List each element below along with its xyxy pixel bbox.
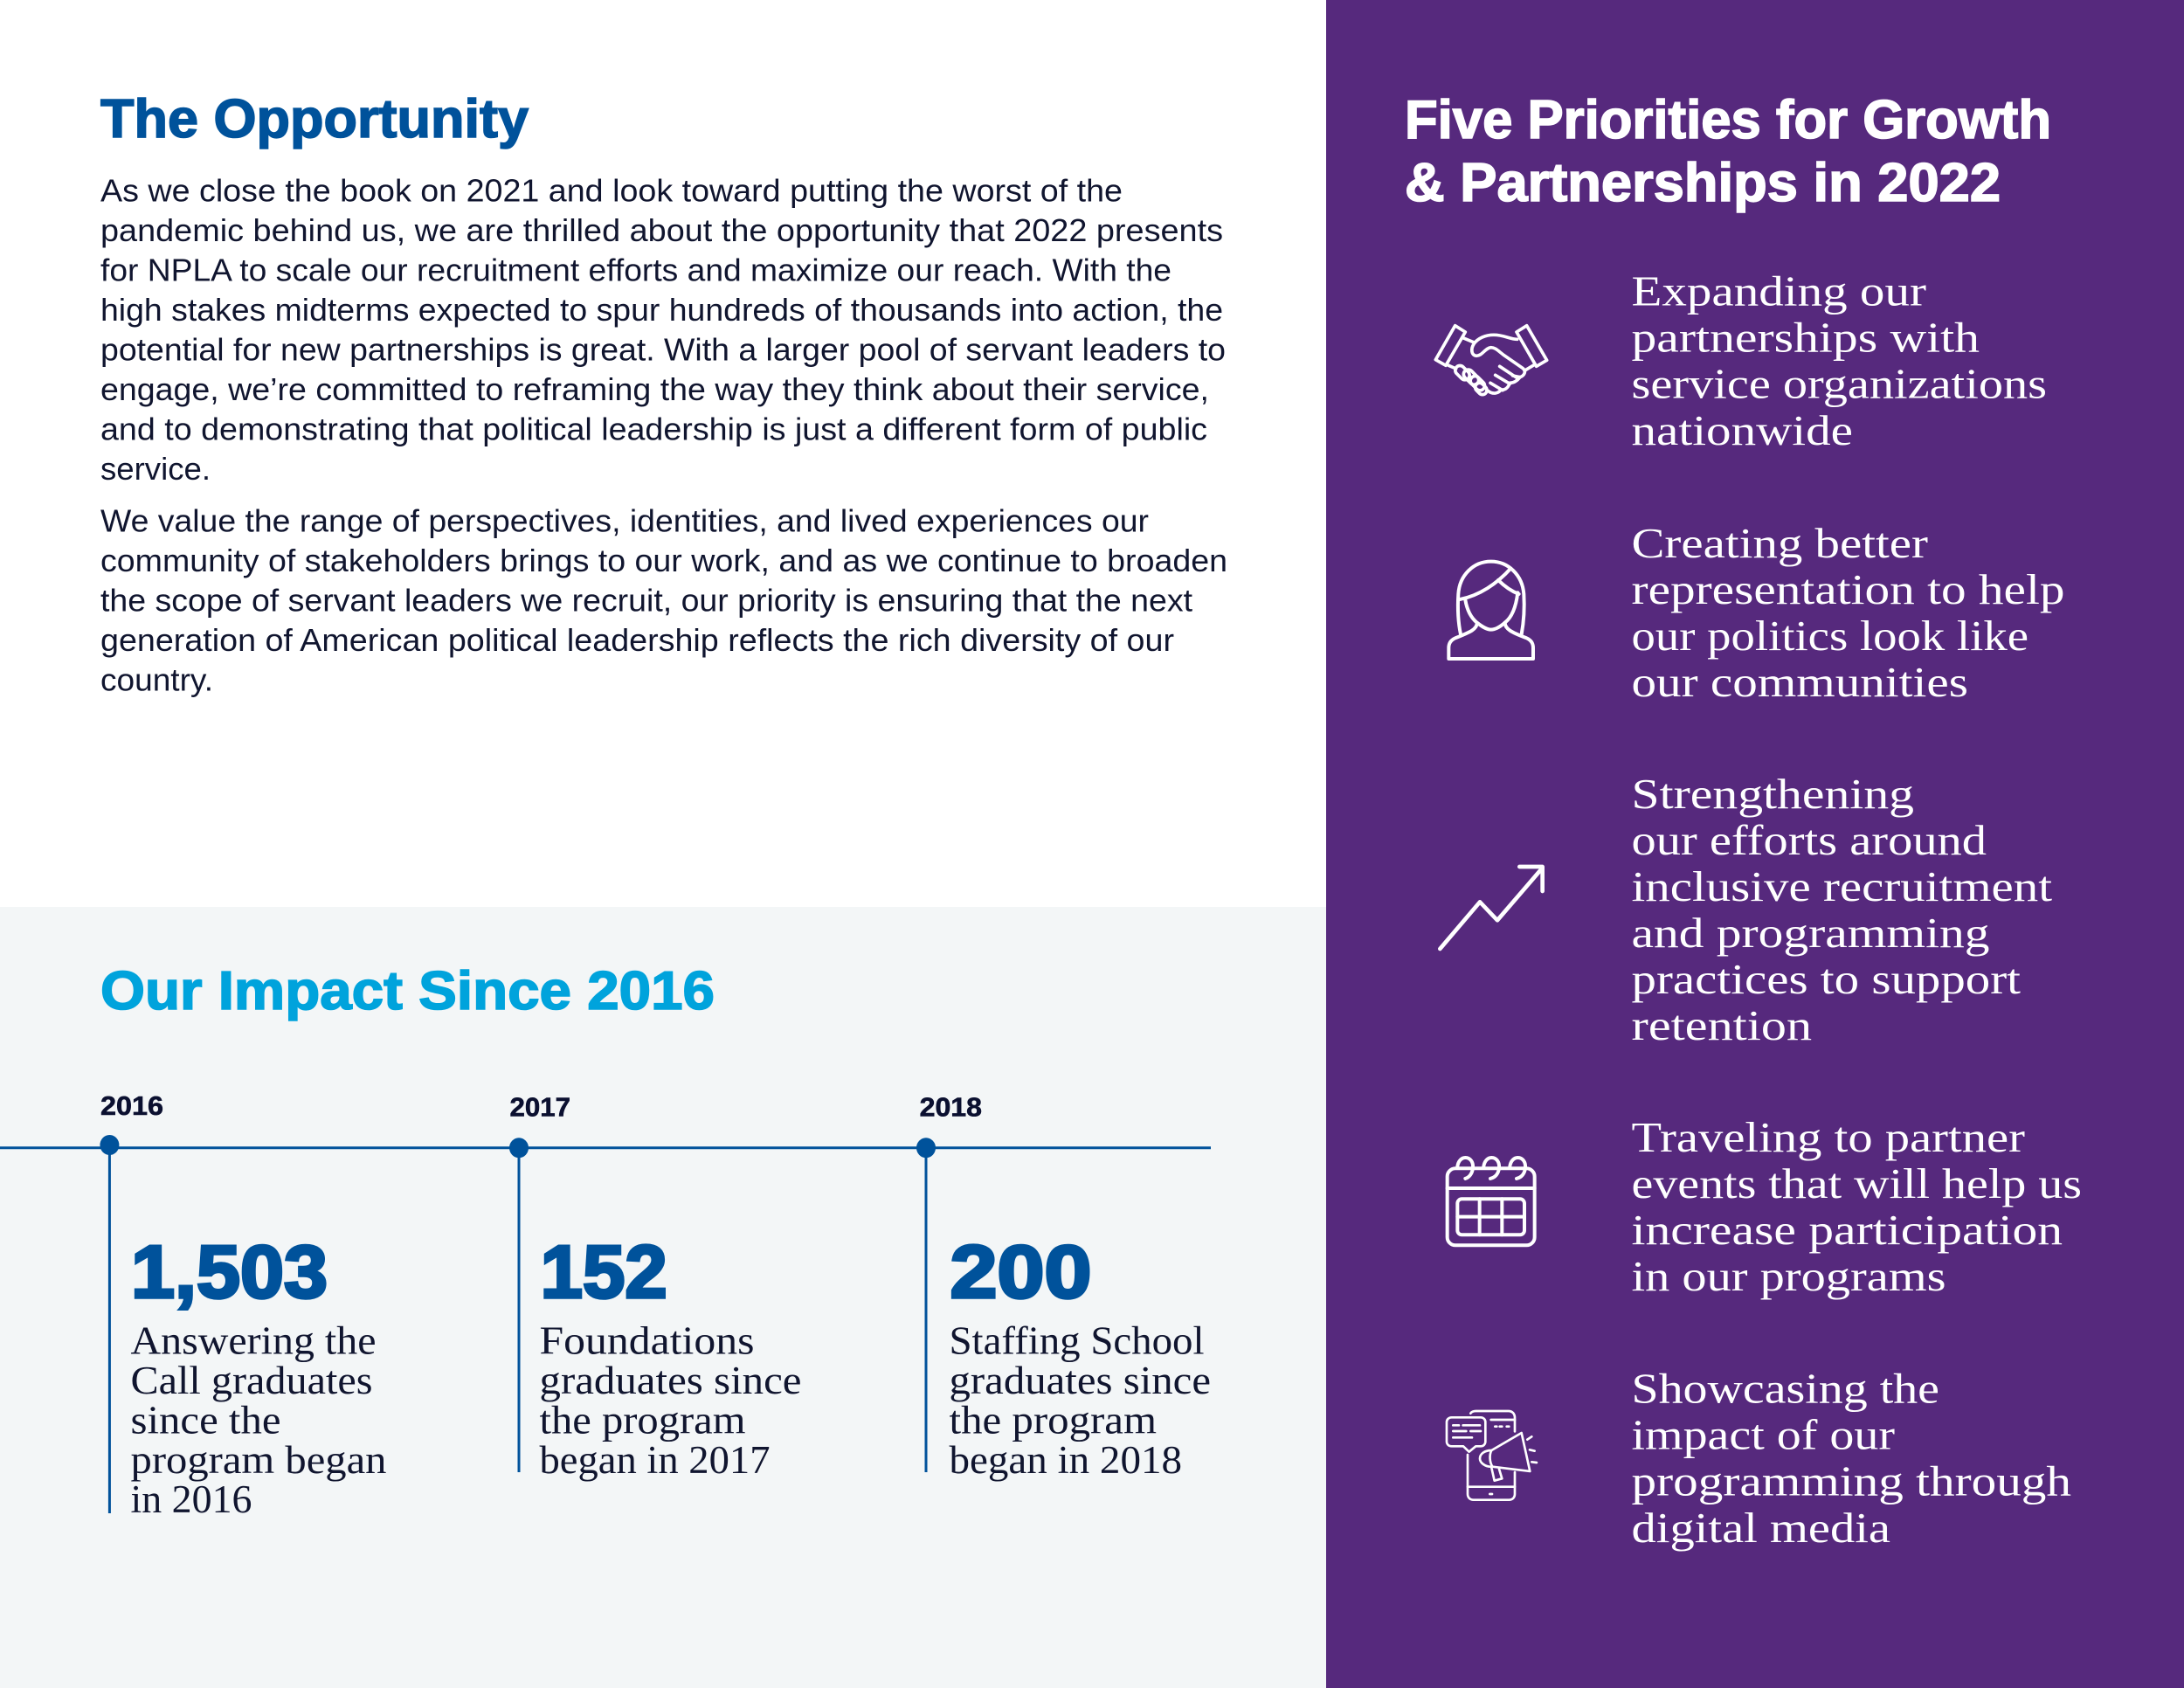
icon: rising arrow [1440, 867, 1543, 949]
text block: second paragraph: the scope of servant leaders we recruit, our priority is ensuring that the next [100, 582, 1192, 619]
text: showcasing impact [1632, 1365, 2071, 1552]
milestone: 2017: began in 2017 [540, 1438, 771, 1482]
milestone: 2018: Staffing School [949, 1319, 1204, 1363]
icon: handshake [1435, 326, 1547, 397]
text: creating representation [1632, 519, 2065, 706]
text block: second paragraph: We value the range of perspectives, identities, and lived experiences our [100, 502, 1149, 538]
icon: phone with megaphone [1447, 1411, 1537, 1500]
text: traveling to events: Traveling to partner [1632, 1113, 2025, 1161]
text: strengthening recruitment [1632, 770, 2052, 1049]
text: strengthening recruitment: and programming [1632, 909, 1990, 957]
heading: Five Priorities for Growth & Partnerships in 2022: & Partnerships in 2022 [1405, 153, 2001, 213]
milestone: 2016: Answering the [131, 1319, 376, 1363]
text: expanding partnerships: service organizations [1632, 360, 2047, 408]
text block: first paragraph [100, 172, 1226, 487]
text: creating representation: representation to help [1632, 565, 2065, 613]
text block: second paragraph [100, 502, 1227, 697]
text block: first paragraph: high stakes midterms expected to spur hundreds of thousands into action, the [100, 292, 1223, 328]
text: expanding partnerships: Expanding our [1632, 266, 1926, 315]
text: traveling to events: events that will help us [1632, 1159, 2082, 1207]
timeline axis [0, 1135, 1211, 1158]
heading: Five Priorities for Growth & Partnerships in 2022: Five Priorities for Growth [1405, 90, 2051, 150]
icon: woman [1448, 562, 1533, 659]
text block: first paragraph: As we close the book on 2021 and look toward putting the worst of the [100, 172, 1123, 208]
text block: second paragraph: community of stakeholders brings to our work, and as we continue to broaden [100, 543, 1227, 578]
milestone: 2018: the program [949, 1398, 1157, 1442]
milestone: 2018: 200 [950, 1231, 1092, 1314]
milestone: 2016: in 2016 [131, 1477, 252, 1521]
milestone: 2017: Foundations [540, 1319, 755, 1363]
milestone: 2016 [100, 1090, 386, 1521]
text: strengthening recruitment: Strengthening [1632, 770, 1914, 818]
text: expanding partnerships: nationwide [1632, 406, 1853, 454]
milestone: 2018: 2018 [920, 1092, 982, 1123]
text block: first paragraph: pandemic behind us, we are thrilled about the opportunity that 2022 presents [100, 212, 1223, 248]
text: showcasing impact: programming through [1632, 1457, 2071, 1505]
text: strengthening recruitment: our efforts around [1632, 816, 1987, 864]
text: showcasing impact: digital media [1632, 1504, 1890, 1552]
text: traveling to events: increase participation [1632, 1206, 2063, 1254]
text block: second paragraph: country. [100, 662, 213, 697]
panel: the opportunity [0, 0, 1326, 907]
text: expanding partnerships: partnerships with [1632, 313, 1980, 362]
text: showcasing impact: Showcasing the [1632, 1365, 1939, 1412]
milestone: 2018 [920, 1092, 1211, 1482]
text block: first paragraph: and to demonstrating that political leadership is just a different form of public [100, 411, 1207, 446]
text: strengthening recruitment: retention [1632, 1001, 1812, 1049]
milestone: 2017: 2017 [510, 1092, 570, 1123]
text: traveling to events [1632, 1113, 2082, 1300]
text block: first paragraph: potential for new partnerships is great. With a larger pool of servant leaders to [100, 331, 1226, 367]
text block: first paragraph: engage, we’re committed to reframing the way they think about their service, [100, 371, 1209, 407]
text: creating representation: Creating better [1632, 519, 1928, 567]
milestone: 2017: graduates since [540, 1359, 802, 1402]
milestone: 2016: Call graduates [131, 1359, 372, 1402]
milestone: 2018: began in 2018 [949, 1438, 1182, 1482]
icon: calendar [1448, 1158, 1535, 1245]
milestone: 2016: since the [131, 1398, 281, 1442]
text: creating representation: our communities [1632, 658, 1968, 706]
milestone: 2017: the program [540, 1398, 746, 1442]
text block: first paragraph: service. [100, 451, 211, 487]
text block: second paragraph: generation of American political leadership reflects the rich diversity of our [100, 622, 1174, 658]
heading: Our Impact Since 2016: Our Impact Since 2016 [100, 961, 715, 1021]
text: strengthening recruitment: inclusive recruitment [1632, 862, 2052, 910]
milestone: 2016: program began [131, 1438, 386, 1482]
text: expanding partnerships [1632, 266, 2047, 454]
text block: first paragraph: for NPLA to scale our recruitment efforts and maximize our reach. With the [100, 252, 1171, 287]
milestone: 2017 [510, 1092, 802, 1482]
text: showcasing impact: impact of our [1632, 1410, 1895, 1459]
milestone: 2016: 1,503 [131, 1231, 328, 1314]
heading: The Opportunity: The Opportunity [100, 89, 529, 149]
milestone: 2018: graduates since [949, 1359, 1211, 1402]
milestone: 2017: 152 [541, 1231, 667, 1314]
panel: our impact since 2016 [0, 907, 1326, 1688]
panel: five priorities [1326, 0, 2184, 1688]
heading: Five Priorities for Growth & Partnerships in 2022 [1405, 90, 2051, 213]
text: creating representation: our politics look like [1632, 612, 2028, 660]
milestone: 2016: 2016 [100, 1090, 163, 1121]
text: strengthening recruitment: practices to support [1632, 955, 2021, 1003]
text: traveling to events: in our programs [1632, 1252, 1946, 1300]
